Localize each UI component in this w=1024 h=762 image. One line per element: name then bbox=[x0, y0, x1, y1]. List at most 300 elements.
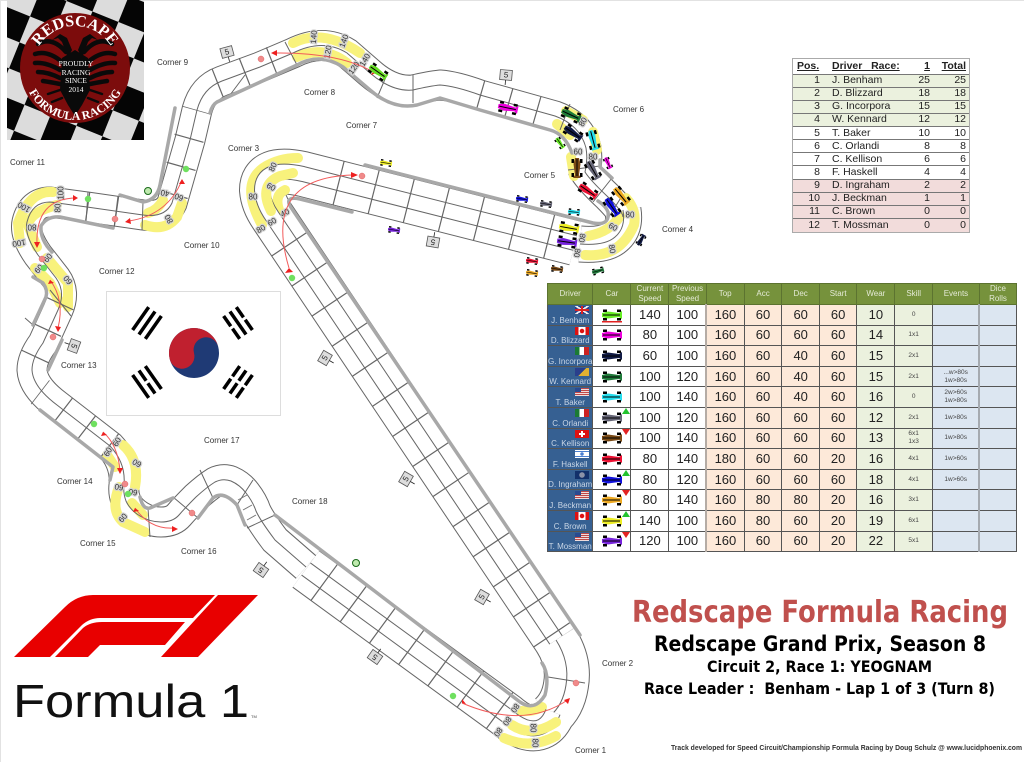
row: T. Mossman: 5x1 bbox=[908, 537, 919, 544]
row: C. Brown: C. Brown bbox=[554, 522, 587, 531]
red sector markers bbox=[39, 56, 579, 686]
standing 2: D. Blizzard bbox=[832, 87, 883, 99]
row: D. Ingraham: 60 bbox=[793, 472, 808, 487]
standing 6: 6 bbox=[814, 140, 820, 152]
yellow bands over three lane corners bbox=[266, 173, 556, 731]
row: C. Orlandi: 12 bbox=[869, 410, 883, 425]
footer credit: Track developed for Speed Circuit/Championship Formula Racing by Doug Schulz @ www.lucidphoenix.com bbox=[671, 745, 1022, 752]
row: W. Kennard: 160 bbox=[715, 369, 736, 384]
row: J. Benham: 100 bbox=[676, 307, 698, 322]
pit board signs: 5 bbox=[503, 70, 509, 80]
row: G. Incorpora: 60 bbox=[756, 348, 770, 363]
speed limit labels: 60 bbox=[266, 216, 279, 228]
corner labels: Corner 13 bbox=[61, 361, 97, 370]
standing 1 bbox=[793, 74, 969, 87]
corner labels: Corner 1 bbox=[575, 746, 607, 755]
logo ring text: REDSCAPE bbox=[30, 16, 118, 46]
row: C. Kellison: 60 bbox=[793, 430, 808, 445]
standing 10: 10 bbox=[808, 192, 820, 204]
standing 7: C. Kellison bbox=[832, 153, 882, 165]
row: J. Benham: J. Benham bbox=[551, 316, 589, 325]
table header: Driver bbox=[560, 289, 581, 298]
logo centre text: SINCE bbox=[65, 76, 87, 85]
standing 1: J. Benham bbox=[832, 74, 882, 86]
row: C. Kellison: 60 bbox=[756, 430, 770, 445]
standing 2 bbox=[793, 87, 969, 100]
table header bbox=[548, 284, 1016, 551]
track surface: white fill bbox=[26, 46, 624, 728]
row: C. Brown: 100 bbox=[676, 513, 698, 528]
row: G. Incorpora bbox=[548, 346, 1016, 366]
standing 11: C. Brown bbox=[832, 205, 875, 217]
row: T. Baker: 60 bbox=[831, 389, 845, 404]
standing 1: 25 bbox=[918, 74, 930, 86]
row: C. Orlandi: C. Orlandi bbox=[552, 419, 588, 428]
green sector markers bbox=[41, 166, 456, 699]
table header: Current Speed bbox=[637, 284, 663, 303]
row: T. Baker: 40 bbox=[793, 389, 808, 404]
speed limit labels: 60 bbox=[265, 181, 278, 193]
standing 12: T. Mossman bbox=[832, 219, 889, 231]
standing 1: 1 bbox=[814, 74, 820, 86]
corner labels: Corner 11 bbox=[10, 158, 46, 167]
row: D. Ingraham: 18 bbox=[869, 472, 883, 487]
row: D. Ingraham: 4x1 bbox=[908, 476, 919, 483]
table header: Rolls bbox=[989, 294, 1007, 303]
row: C. Brown: 80 bbox=[756, 513, 770, 528]
speed limit labels: 140 bbox=[337, 33, 351, 49]
standings header: Pos. bbox=[797, 60, 819, 72]
standing 5 bbox=[814, 127, 966, 139]
pit board signs: 5 bbox=[429, 237, 436, 247]
row: W. Kennard: W. Kennard bbox=[549, 377, 591, 386]
speed limit labels: 40 bbox=[279, 207, 292, 219]
row: C. Orlandi: 160 bbox=[715, 410, 736, 425]
row: T. Baker: 100 bbox=[639, 389, 661, 404]
corner labels bbox=[10, 58, 694, 755]
row: T. Mossman: 60 bbox=[756, 533, 770, 548]
start finish hatch bbox=[238, 495, 256, 520]
row: D. Blizzard: 14 bbox=[869, 327, 883, 342]
speed limit labels: 80 bbox=[528, 724, 538, 733]
row: D. Ingraham: 80 bbox=[643, 472, 657, 487]
logo centre text bbox=[58, 61, 94, 92]
row: J. Benham: 60 bbox=[756, 307, 770, 322]
speed limit labels: 80 bbox=[54, 203, 62, 212]
standing 9: 2 bbox=[924, 179, 930, 191]
speed limit labels: 60 bbox=[102, 445, 114, 458]
row: T. Mossman: 60 bbox=[793, 533, 808, 548]
row: D. Ingraham: D. Ingraham bbox=[548, 480, 592, 489]
row: C. Brown: 160 bbox=[715, 513, 736, 528]
speed limit labels: 80 bbox=[530, 739, 540, 748]
speed limit labels: 100 bbox=[56, 186, 66, 200]
row: T. Baker: 140 bbox=[676, 389, 698, 404]
speed limit labels bbox=[11, 29, 635, 748]
row: F. Haskell: F. Haskell bbox=[553, 460, 588, 469]
row: T. Mossman: 120 bbox=[639, 533, 661, 548]
speed limit labels: 80 bbox=[163, 212, 175, 225]
standing 3: 15 bbox=[954, 100, 966, 112]
pit board signs: 5 bbox=[256, 565, 265, 575]
barrier kerbs bbox=[33, 59, 612, 706]
lane lines bbox=[26, 46, 624, 716]
row: D. Blizzard: 80 bbox=[643, 327, 657, 342]
table header: Top bbox=[719, 289, 732, 298]
standing 10: J. Beckman bbox=[832, 192, 887, 204]
table header: Previous Speed bbox=[672, 284, 703, 303]
speed limit labels: 80 bbox=[249, 192, 258, 202]
standing 8: F. Haskell bbox=[832, 166, 878, 178]
row: D. Ingraham: 160 bbox=[715, 472, 736, 487]
row: D. Ingraham: 1w>60s bbox=[944, 476, 967, 483]
f1 logo bbox=[13, 595, 258, 727]
row: C. Brown: 140 bbox=[639, 513, 661, 528]
row: J. Beckman: 3x1 bbox=[908, 496, 919, 503]
row: F. Haskell: 16 bbox=[869, 451, 883, 466]
pit board signs: 5 bbox=[401, 474, 411, 483]
standing 11 bbox=[793, 205, 969, 218]
row: F. Haskell: 60 bbox=[756, 451, 770, 466]
row: W. Kennard: 40 bbox=[793, 369, 808, 384]
row: T. Baker: T. Baker bbox=[556, 398, 585, 407]
row: F. Haskell: 20 bbox=[831, 451, 845, 466]
speed limit labels: 60 bbox=[127, 487, 138, 497]
row: T. Mossman: 160 bbox=[715, 533, 736, 548]
speed limit labels: 80 bbox=[572, 248, 582, 259]
row: D. Ingraham: 60 bbox=[831, 472, 845, 487]
chicane and corner exit ticks bbox=[25, 42, 622, 683]
row: T. Mossman bbox=[548, 532, 1016, 551]
standings header: Total bbox=[942, 60, 966, 72]
standing 5: 10 bbox=[918, 127, 930, 139]
row: C. Kellison: 13 bbox=[869, 430, 883, 445]
row: G. Incorpora: G. Incorpora bbox=[548, 357, 592, 366]
speed limit labels: 60 bbox=[574, 148, 583, 156]
pit board signs: 5 bbox=[477, 592, 487, 601]
standing 7 bbox=[814, 153, 966, 165]
speed limit labels: 80 bbox=[577, 115, 589, 128]
row: F. Haskell: 140 bbox=[676, 451, 698, 466]
corner labels: Corner 5 bbox=[524, 171, 556, 180]
standing 5: 5 bbox=[814, 127, 820, 139]
driver status table bbox=[547, 283, 1017, 552]
speed limit labels: 80 bbox=[27, 222, 36, 232]
row: T. Baker: 2w>60s bbox=[944, 389, 967, 396]
row: C. Orlandi: 60 bbox=[756, 410, 770, 425]
standing 4: 12 bbox=[918, 113, 930, 125]
three lane dividers bbox=[262, 172, 575, 728]
row: D. Blizzard: 60 bbox=[793, 327, 808, 342]
row: C. Brown: 20 bbox=[831, 513, 845, 528]
standing 10 bbox=[793, 192, 969, 205]
standing 5: 10 bbox=[954, 127, 966, 139]
standing 3: 3 bbox=[814, 100, 820, 112]
standing 4: W. Kennard bbox=[832, 113, 887, 125]
standing 11: 11 bbox=[809, 205, 820, 217]
corner labels: Corner 16 bbox=[181, 547, 217, 556]
standing 1: 25 bbox=[954, 74, 966, 86]
speed limit labels: 80 bbox=[589, 152, 598, 162]
standing 6: 8 bbox=[924, 140, 930, 152]
row: W. Kennard: 120 bbox=[676, 369, 698, 384]
standing 10: 1 bbox=[960, 192, 966, 204]
speed limit labels: 80 bbox=[577, 233, 587, 244]
circuit title: Circuit 2, Race 1: YEOGNAM bbox=[707, 657, 932, 676]
row: F. Haskell bbox=[548, 449, 1016, 469]
red movement arrows bbox=[37, 53, 569, 716]
row: F. Haskell: 1w>60s bbox=[944, 455, 967, 462]
row: J. Beckman: 80 bbox=[756, 492, 770, 507]
row: J. Benham: 10 bbox=[869, 307, 883, 322]
row: T. Mossman: 100 bbox=[676, 533, 698, 548]
speed limit labels: 60 bbox=[607, 221, 620, 233]
standing 12: 0 bbox=[960, 219, 966, 231]
speed limit labels: 100 bbox=[15, 199, 32, 214]
logo centre text: 2014 bbox=[68, 85, 84, 94]
row: C. Orlandi: 120 bbox=[676, 410, 698, 425]
standing 8: 4 bbox=[924, 166, 930, 178]
row: T. Baker: 16 bbox=[869, 389, 883, 404]
sector tick lines two lane bbox=[32, 53, 560, 446]
corner labels: Corner 8 bbox=[304, 88, 336, 97]
corner labels: Corner 17 bbox=[204, 436, 240, 445]
row: C. Orlandi: 100 bbox=[639, 410, 661, 425]
standing 11: 0 bbox=[924, 205, 930, 217]
table header: Events bbox=[944, 289, 968, 298]
row: F. Haskell: 60 bbox=[793, 451, 808, 466]
standing 8 bbox=[814, 166, 966, 178]
row: C. Kellison: 1w>80s bbox=[944, 434, 967, 441]
row: J. Beckman: 160 bbox=[715, 492, 736, 507]
row: D. Blizzard: D. Blizzard bbox=[551, 336, 590, 345]
row: G. Incorpora: 60 bbox=[643, 348, 657, 363]
standing 3: G. Incorpora bbox=[832, 100, 890, 112]
championship standings table bbox=[792, 58, 970, 233]
speed limit labels: 60 bbox=[111, 435, 123, 448]
row: T. Mossman: 22 bbox=[869, 533, 883, 548]
standing 7: 6 bbox=[924, 153, 930, 165]
row: C. Kellison bbox=[548, 429, 1016, 448]
row: C. Brown: 19 bbox=[869, 513, 883, 528]
corner labels: Corner 2 bbox=[602, 659, 634, 668]
speed limit labels: 60 bbox=[33, 262, 46, 275]
row: C. Brown bbox=[548, 511, 1016, 531]
table header: Acc bbox=[756, 289, 770, 298]
corner labels: Corner 3 bbox=[228, 144, 260, 153]
row: W. Kennard: 2x1 bbox=[908, 373, 919, 380]
row: C. Kellison: C. Kellison bbox=[551, 439, 589, 448]
row: W. Kennard: ...w>80s bbox=[944, 369, 968, 376]
row: F. Haskell: 4x1 bbox=[908, 455, 919, 462]
pit board signs bbox=[63, 46, 512, 665]
standing 4 bbox=[793, 113, 969, 126]
pit board signs: 5 bbox=[370, 652, 379, 662]
row: T. Baker: 160 bbox=[715, 389, 736, 404]
standing 2: 18 bbox=[918, 87, 930, 99]
row: T. Baker: 60 bbox=[756, 389, 770, 404]
speed limit labels: 120 bbox=[322, 44, 334, 59]
row: W. Kennard: 60 bbox=[831, 369, 845, 384]
row: G. Incorpora: 60 bbox=[831, 348, 845, 363]
speed limit labels: 60 bbox=[117, 511, 130, 524]
row: C. Brown: 6x1 bbox=[908, 517, 919, 524]
title block bbox=[632, 595, 1008, 698]
table header: Dec bbox=[794, 289, 808, 298]
south korean flag bbox=[106, 292, 280, 416]
standing 3 bbox=[793, 100, 969, 113]
f1 mark bbox=[14, 595, 258, 657]
row: D. Ingraham: 60 bbox=[756, 472, 770, 487]
table header: Skill bbox=[906, 289, 921, 298]
row: G. Incorpora: 100 bbox=[676, 348, 698, 363]
standing 6: C. Orlandi bbox=[832, 140, 879, 152]
taegeuk bbox=[163, 322, 225, 384]
lap marker icons bbox=[144, 188, 360, 566]
logo ring text bbox=[28, 16, 120, 120]
track surface: outlines bbox=[26, 46, 624, 728]
table header: Start bbox=[830, 289, 847, 298]
corner labels: Corner 15 bbox=[80, 539, 116, 548]
row: G. Incorpora: 15 bbox=[869, 348, 883, 363]
trigrams bbox=[131, 306, 254, 399]
row: T. Mossman: T. Mossman bbox=[549, 542, 592, 551]
row: C. Orlandi: 60 bbox=[831, 410, 845, 425]
corner labels: Corner 18 bbox=[292, 497, 328, 506]
row: T. Mossman: 20 bbox=[831, 533, 845, 548]
standing 8: 4 bbox=[960, 166, 966, 178]
speed limit labels: 120 bbox=[346, 60, 362, 76]
standing 9: 2 bbox=[960, 179, 966, 191]
row: G. Incorpora: 2x1 bbox=[908, 352, 919, 359]
logo centre text: PROUDLY bbox=[59, 59, 94, 68]
speed limit labels: 100 bbox=[11, 237, 26, 249]
pit board signs: 5 bbox=[224, 47, 231, 57]
racing circuit bbox=[18, 37, 635, 744]
row: J. Beckman: 80 bbox=[643, 492, 657, 507]
row: C. Orlandi: 2x1 bbox=[908, 414, 919, 421]
cars on track bbox=[367, 62, 632, 249]
row: J. Beckman bbox=[548, 490, 1016, 510]
standing 7: 7 bbox=[814, 153, 820, 165]
corner labels: Corner 4 bbox=[662, 225, 694, 234]
standing 9 bbox=[793, 179, 969, 192]
row: C. Orlandi: 60 bbox=[793, 410, 808, 425]
table header: Wear bbox=[866, 289, 885, 298]
row: C. Kellison: 160 bbox=[715, 430, 736, 445]
row: W. Kennard: 60 bbox=[756, 369, 770, 384]
standing 4: 4 bbox=[814, 113, 820, 125]
speed limit labels: 60 bbox=[42, 251, 55, 264]
row: J. Beckman: 140 bbox=[676, 492, 698, 507]
standing 3: 15 bbox=[918, 100, 930, 112]
row: T. Baker: 1w>80s bbox=[944, 397, 967, 404]
corner labels: Corner 14 bbox=[57, 477, 93, 486]
eagle emblem bbox=[35, 34, 115, 116]
standing 12: 0 bbox=[924, 219, 930, 231]
standing 8: 8 bbox=[814, 166, 820, 178]
row: T. Baker bbox=[548, 387, 1016, 407]
standing 12 bbox=[793, 219, 969, 232]
speed limit labels: 60 bbox=[61, 273, 74, 286]
logo ring text: FORMULA RACING bbox=[28, 88, 120, 120]
row: D. Blizzard: 100 bbox=[676, 327, 698, 342]
yellow corner bands bbox=[18, 37, 635, 744]
row: C. Kellison: 100 bbox=[639, 430, 661, 445]
f1 logo: TM bbox=[251, 714, 257, 719]
standing 2: 18 bbox=[954, 87, 966, 99]
row: W. Kennard: 15 bbox=[869, 369, 883, 384]
row: D. Blizzard bbox=[548, 326, 1016, 345]
row: C. Kellison: 60 bbox=[831, 430, 845, 445]
row: G. Incorpora: 160 bbox=[715, 348, 736, 363]
row: J. Benham: 60 bbox=[793, 307, 808, 322]
row: D. Ingraham bbox=[548, 470, 1016, 489]
speed limit labels: 80 bbox=[500, 715, 513, 728]
row: C. Orlandi: 1w>80s bbox=[944, 414, 967, 421]
arrow heads bbox=[34, 50, 570, 704]
row: W. Kennard: 100 bbox=[639, 369, 661, 384]
speed limit labels: 80 bbox=[491, 726, 504, 739]
row: D. Ingraham: 120 bbox=[676, 472, 698, 487]
logo centre text: RACING bbox=[62, 68, 91, 77]
row: J. Benham bbox=[548, 305, 1016, 325]
row: D. Blizzard: 60 bbox=[831, 327, 845, 342]
standing 4: 12 bbox=[954, 113, 966, 125]
sector tick lines bbox=[290, 183, 575, 711]
speed limit labels: 80 bbox=[255, 223, 268, 235]
row: J. Beckman: 80 bbox=[793, 492, 808, 507]
row: C. Kellison: 1x3 bbox=[908, 438, 919, 445]
row: W. Kennard: 1w>80s bbox=[944, 377, 967, 384]
row: C. Brown: 60 bbox=[793, 513, 808, 528]
row: C. Orlandi bbox=[548, 408, 1016, 428]
corner labels: Corner 9 bbox=[157, 58, 189, 67]
corner labels: Corner 7 bbox=[346, 121, 378, 130]
pit board signs: 5 bbox=[320, 353, 330, 362]
season title: Redscape Grand Prix, Season 8 bbox=[654, 632, 986, 656]
speed limit labels: 140 bbox=[309, 29, 319, 44]
row: C. Kellison: 6x1 bbox=[908, 430, 919, 437]
row: D. Blizzard: 160 bbox=[715, 327, 736, 342]
row: F. Haskell: 80 bbox=[643, 451, 657, 466]
table header: Dice bbox=[990, 284, 1006, 293]
standing 7: 6 bbox=[960, 153, 966, 165]
speed limit labels: 80 bbox=[267, 161, 279, 173]
pit board signs: 5 bbox=[69, 342, 79, 350]
standing 2: 2 bbox=[814, 87, 820, 99]
row: T. Baker: 0 bbox=[912, 393, 915, 400]
cars in pit and off track bbox=[380, 136, 647, 277]
standing 9: D. Ingraham bbox=[832, 179, 890, 191]
row: G. Incorpora: 40 bbox=[793, 348, 808, 363]
standing 12: 12 bbox=[808, 219, 820, 231]
row: J. Benham: 0 bbox=[912, 311, 915, 318]
row: C. Kellison: 140 bbox=[676, 430, 698, 445]
standing 10: 1 bbox=[924, 192, 930, 204]
speed limit labels: 140 bbox=[358, 51, 373, 68]
row: J. Benham: 160 bbox=[715, 307, 736, 322]
speed limit labels: 60 bbox=[130, 457, 143, 469]
row: W. Kennard bbox=[548, 367, 1016, 386]
standings header: 1 bbox=[924, 60, 930, 72]
row: J. Benham: 60 bbox=[831, 307, 845, 322]
speed limit labels: 40 bbox=[159, 188, 170, 198]
row: F. Haskell: 180 bbox=[715, 451, 736, 466]
row: J. Beckman: 16 bbox=[869, 492, 883, 507]
corner labels: Corner 6 bbox=[613, 105, 645, 114]
row: J. Benham: 140 bbox=[639, 307, 661, 322]
